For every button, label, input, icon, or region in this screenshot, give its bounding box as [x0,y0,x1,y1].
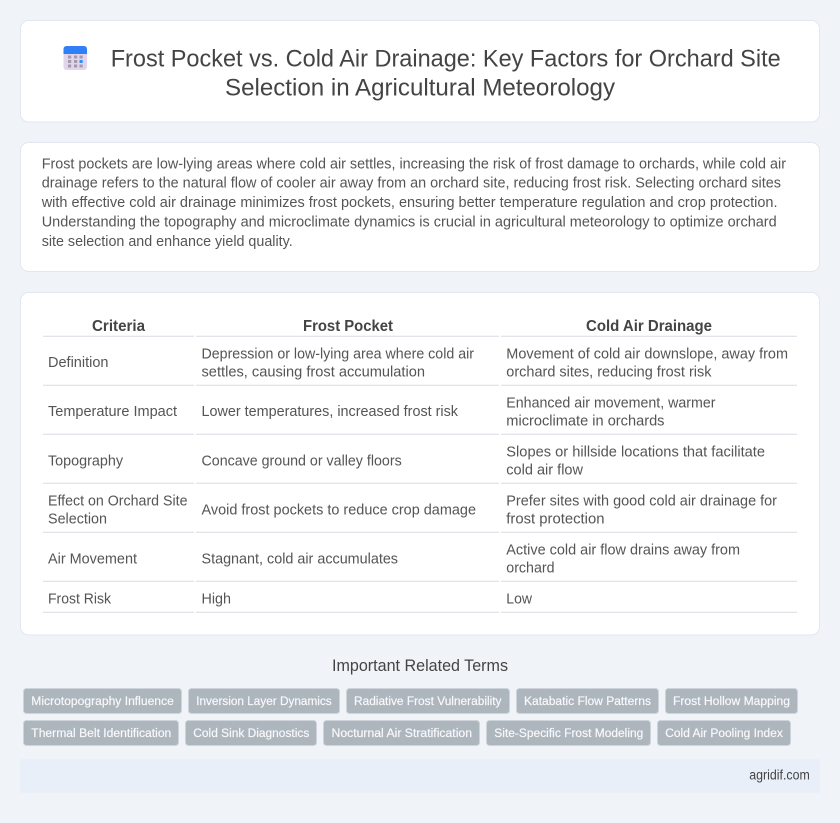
intro paragraph: Understanding the topography and microclimate dynamics is crucial in agricultural meteorology to optimize orchard [42,214,777,230]
row: air movement: orchard [506,560,554,576]
tag: frost hollow mapping [666,688,798,714]
row: definition: orchard sites, reducing frost risk [506,364,712,380]
footer source text: agridif.com [749,768,810,782]
footer bar [20,759,820,793]
panel: comparison table [20,292,820,635]
row: temperature impact: Temperature Impact [48,404,177,420]
row: topography: Concave ground or valley floors [202,453,402,469]
row: air movement: Stagnant, cold air accumulates [202,551,398,567]
intro paragraph: site selection and enhance yield quality. [42,233,293,250]
row: effect on orchard site selection: frost protection [506,511,604,527]
title: Selection in Agricultural Meteorology [225,74,616,102]
intro paragraph: Frost pockets are low-lying areas where cold air settles, increasing the risk of frost damage to orchards, while cold air [42,155,786,172]
tag: cold air pooling index: Cold Air Pooling Index [665,726,784,740]
row: temperature impact: Lower temperatures, increased frost risk [202,404,459,420]
title: Frost Pocket vs. Cold Air Drainage: Key Factors for Orchard Site [111,46,781,72]
tag: cold sink diagnostics: Cold Sink Diagnostics [193,726,309,740]
row: frost risk: Frost Risk [48,591,112,607]
row: definition: Depression or low-lying area where cold air [202,346,474,362]
row: topography: Slopes or hillside locations that facilitate [506,444,765,460]
row: frost risk: High [202,591,231,607]
panel: title header [20,20,820,122]
row: definition: Movement of cold air downslope, away from [506,346,788,362]
row: topography: Topography [48,453,124,469]
row: temperature impact: Enhanced air movement, warmer [506,395,716,411]
tag: radiative frost vulnerability: Radiative Frost Vulnerability [354,694,502,708]
tag: frost hollow mapping: Frost Hollow Mapping [673,694,790,708]
row: frost risk [43,591,797,613]
row: effect on orchard site selection: Effect on Orchard Site [48,493,188,509]
row: effect on orchard site selection: Avoid frost pockets to reduce crop damage [202,502,476,518]
tag: nocturnal air stratification: Nocturnal Air Stratification [332,726,472,740]
tag: thermal belt identification: Thermal Belt Identification [31,726,171,740]
row: frost risk: Low [506,591,533,607]
tag: inversion layer dynamics [188,688,340,714]
row: effect on orchard site selection: Prefer sites with good cold air drainage for [506,493,777,509]
tag: site-specific frost modeling [486,720,650,746]
row: topography [43,444,797,484]
table header row: Frost Pocket [303,318,394,335]
row: air movement: Air Movement [48,551,137,567]
tag: thermal belt identification [24,720,178,746]
tag: nocturnal air stratification [324,720,480,746]
tag: katabatic flow patterns [516,688,658,714]
tag: katabatic flow patterns: Katabatic Flow Patterns [524,694,651,708]
table header row: Cold Air Drainage [586,318,712,335]
related terms heading: Important Related Terms [332,657,508,675]
row: effect on orchard site selection: Selection [48,511,107,527]
table header row: Criteria [92,318,145,335]
related terms section [24,657,798,746]
row: definition: settles, causing frost accumulation [202,364,425,380]
intro paragraph [41,155,786,250]
table header row [43,318,797,337]
row: temperature impact [43,395,797,435]
row: definition: Definition [48,355,108,371]
panel: introduction [20,142,820,272]
tag: site-specific frost modeling: Site-Specific Frost Modeling [494,726,643,740]
tag: microtopography influence: Microtopography Influence [31,694,174,708]
title [111,46,781,102]
tag: cold sink diagnostics [186,720,316,746]
tag: inversion layer dynamics: Inversion Layer Dynamics [196,694,332,708]
tag: cold air pooling index [658,720,790,746]
intro paragraph: drainage refers to the natural flow of cooler air away from an orchard site, reducing frost risk. Selecting orchard sites [42,174,781,192]
intro paragraph: with effective cold air drainage minimizes frost pockets, ensuring better temperature regulation and crop protection. [41,194,777,211]
row: topography: cold air flow [506,462,584,478]
row: air movement: Active cold air flow drains away from [506,542,740,558]
row: air movement [43,542,797,582]
row: effect on orchard site selection [43,493,797,533]
tag: microtopography influence [24,688,182,714]
icon: calendar [64,46,87,70]
row: definition [43,346,797,386]
tag: radiative frost vulnerability [346,688,510,714]
row: temperature impact: microclimate in orchards [506,413,664,429]
